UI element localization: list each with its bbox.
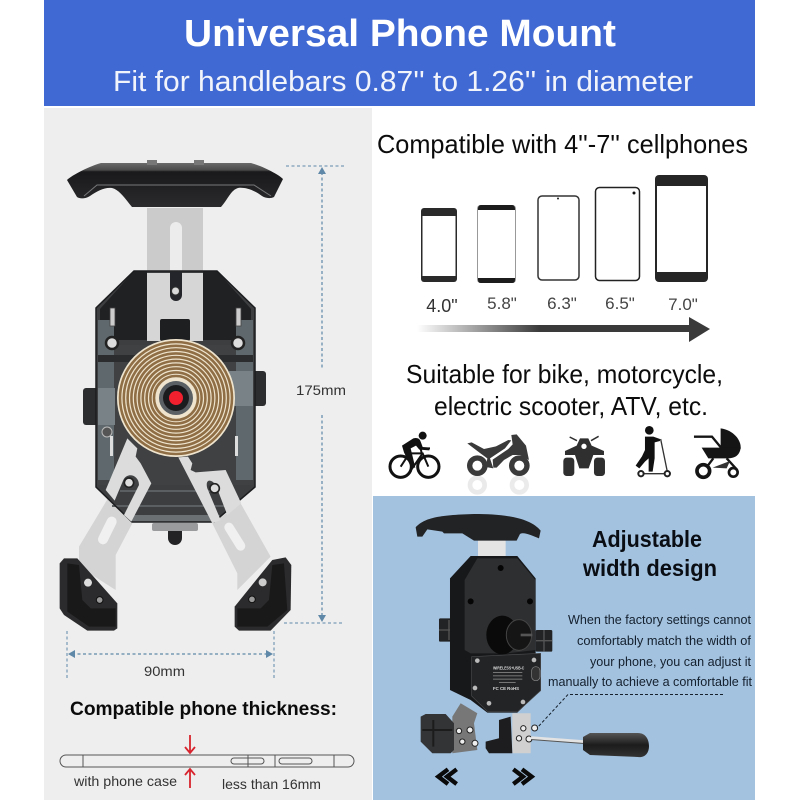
rear left foot [421,714,454,753]
text: suitable vehicles [406,359,723,421]
phone 4.0: 4.0" [426,296,458,316]
phone 7.0 [655,175,708,314]
dimension: 175mm height [284,166,346,623]
icon: motorcycle [467,434,529,492]
title: Universal Phone Mount [184,13,616,55]
phone 6.3: 6.3" [547,294,577,313]
side grip right [229,371,266,406]
heading: adjustable width design: width design [582,555,717,581]
mount front view [60,160,291,631]
rear specification label [493,666,524,691]
icon: ATV [563,436,605,476]
screwdriver [531,733,649,757]
text: suitable vehicles: electric scooter, ATV, etc. [434,391,708,421]
dimension: 90mm width [67,631,274,679]
red center dot [169,391,183,405]
foot right [235,557,291,631]
heading: phone thickness: Compatible phone thickness: [70,699,337,720]
rear body housing [450,556,541,713]
subtitle: Fit for handlebars 0.87'' to 1.26'' in diameter [113,66,693,98]
label: less than 16mm: less than 16mm [222,776,321,792]
wireless charging coil [117,339,235,457]
icon: kick scooter [636,426,670,476]
icon: bicycle [390,432,439,477]
rear lower brackets [452,703,531,753]
foot left [60,558,117,631]
text: adjustment description [548,612,752,689]
body housing [96,271,255,522]
text: adjustment description: comfortably match the width of [577,633,751,648]
phone sizes row [421,175,708,316]
phone 7.0: 7.0" [668,295,698,314]
top stem [147,208,203,278]
phone 6.5 [596,188,640,313]
dimension: 90mm width: 90mm [144,663,185,679]
chevrons left [438,769,457,784]
phone side profile [60,755,354,767]
phone 5.8: 5.8" [487,294,517,313]
panel: adjustable width [373,496,755,800]
stem over body [147,272,203,341]
header banner [44,0,755,106]
phone 6.5: 6.5" [605,294,635,313]
left adjustment arm [106,438,151,522]
rear top grip [416,514,541,541]
side grip left [83,388,115,425]
right adjustment arm [178,457,241,523]
screws and clips [102,308,244,456]
phone 4.0 [421,208,458,316]
text: adjustment description: your phone, you can adjust it [590,654,751,669]
size progression arrow [417,317,710,342]
phone 6.3 [538,196,579,313]
panel: mount dimensions [44,108,372,800]
bottom tab [152,523,198,545]
lower arms behind body [79,497,271,590]
phone 5.8 [478,205,517,313]
top grip [67,160,283,207]
heading: adjustable width design [582,526,717,581]
text: adjustment description: manually to achieve a comfortable fit [548,674,752,689]
label: with phone case: with phone case [73,773,177,789]
mount rear view [416,514,552,784]
vehicle icons [390,426,741,492]
rear specification label: WIRELESS+USB-C [493,666,524,671]
red thickness arrows [185,735,195,788]
heading: compatible cellphones: Compatible with 4''-7'' cellphones [377,129,748,159]
text: adjustment description: When the factory settings cannot [568,612,751,627]
rear screws [456,725,538,746]
rear specification label: FC CE RoHS [493,686,519,691]
dimension: 175mm height: 175mm [296,382,346,398]
heading: adjustable width design: Adjustable [592,526,702,552]
rear knob [486,616,532,654]
rear stem [478,540,506,563]
rear side grips [439,618,552,652]
text: suitable vehicles: Suitable for bike, motorcycle, [406,359,723,389]
chevrons right [513,769,532,784]
dashed pointer line [537,694,723,728]
icon: baby stroller [694,428,741,477]
